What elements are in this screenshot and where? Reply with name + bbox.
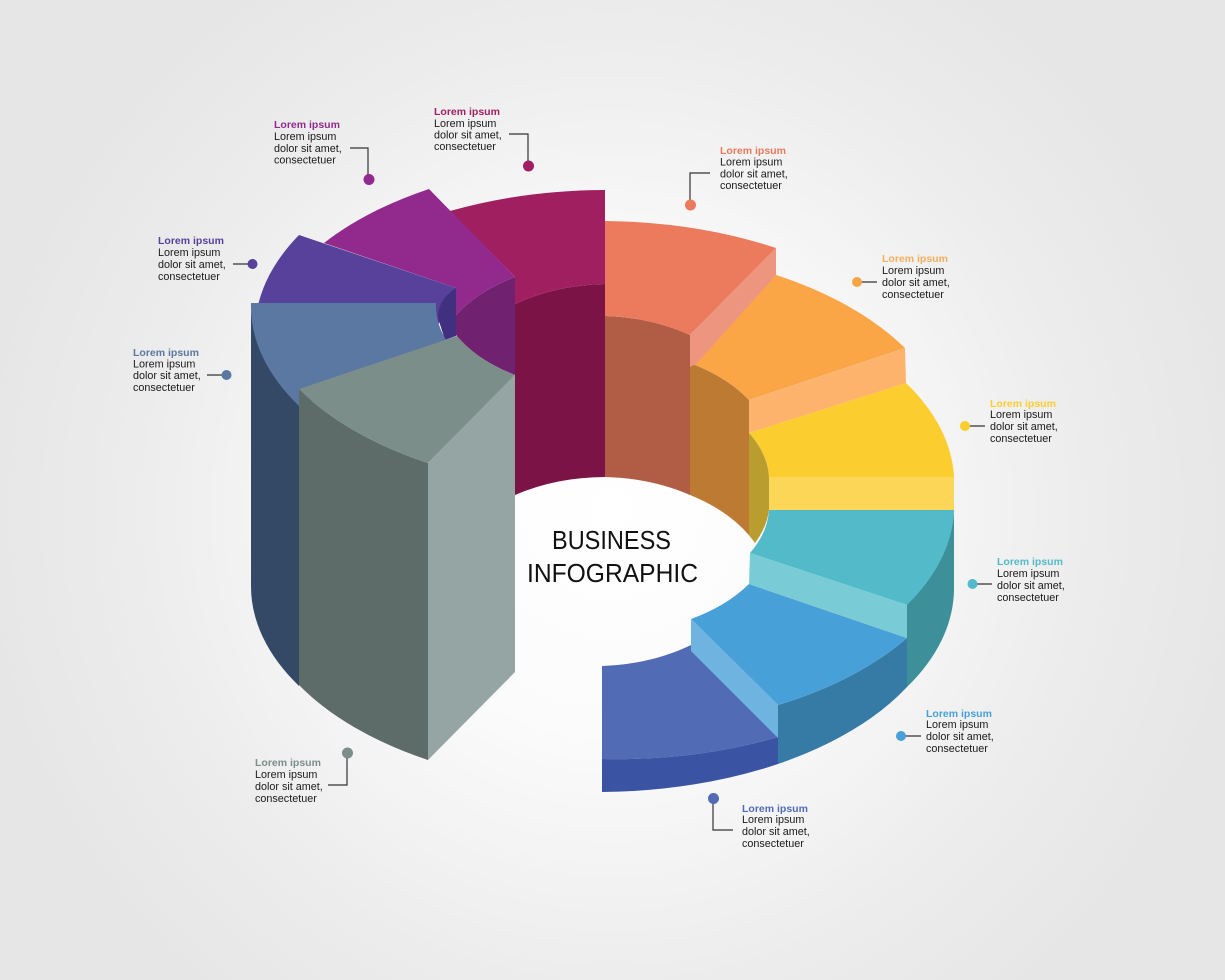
callout: salmon bbox=[685, 145, 788, 210]
callout: yellow: dolor sit amet, bbox=[990, 421, 1058, 433]
callout: yellow bbox=[960, 398, 1058, 445]
callout: blue: Lorem ipsum bbox=[926, 708, 992, 720]
callout: salmon: consectetuer bbox=[720, 180, 782, 192]
callout: crimson: consectetuer bbox=[434, 141, 496, 153]
callout: crimson: Lorem ipsum bbox=[434, 118, 496, 130]
callout: indigo: dolor sit amet, bbox=[158, 259, 226, 271]
segment: orange bbox=[690, 275, 906, 543]
callout: violet: consectetuer bbox=[274, 154, 336, 166]
segment: blue bbox=[691, 584, 907, 764]
title: BUSINESS bbox=[552, 525, 671, 555]
callout: indigo bbox=[158, 235, 258, 283]
callout: slate blue: dolor sit amet, bbox=[133, 370, 201, 382]
segment: crimson bbox=[450, 190, 605, 495]
title bbox=[527, 525, 698, 588]
callout: crimson: Lorem ipsum bbox=[434, 106, 500, 118]
callout: indigo blue bbox=[708, 793, 810, 850]
segment: indigo blue bbox=[602, 645, 778, 792]
callout: orange: dolor sit amet, bbox=[882, 277, 950, 289]
segment: salmon bbox=[605, 221, 776, 495]
callout: indigo blue: consectetuer bbox=[742, 838, 804, 850]
callout: violet: dolor sit amet, bbox=[274, 143, 342, 155]
callout: orange: Lorem ipsum bbox=[882, 265, 944, 277]
segment: grey green bbox=[299, 336, 515, 760]
callout: blue: consectetuer bbox=[926, 743, 988, 755]
segment: violet bbox=[324, 189, 515, 375]
callout: orange: consectetuer bbox=[882, 289, 944, 301]
callout: slate blue bbox=[133, 347, 232, 394]
callout: orange bbox=[852, 253, 950, 301]
callout: indigo blue: Lorem ipsum bbox=[742, 814, 804, 826]
callout: indigo blue: dolor sit amet, bbox=[742, 826, 810, 838]
callout: yellow: Lorem ipsum bbox=[990, 409, 1052, 421]
callout: violet: Lorem ipsum bbox=[274, 119, 340, 131]
callout: grey green: dolor sit amet, bbox=[255, 781, 323, 793]
callout: salmon: Lorem ipsum bbox=[720, 145, 786, 157]
callout: blue bbox=[896, 708, 994, 755]
callout: indigo: Lorem ipsum bbox=[158, 247, 220, 259]
callout: slate blue: Lorem ipsum bbox=[133, 347, 199, 359]
callout: blue: dolor sit amet, bbox=[926, 731, 994, 743]
callout: teal bbox=[968, 556, 1065, 604]
callout: grey green bbox=[255, 748, 353, 805]
segment: teal bbox=[749, 510, 954, 687]
callout: teal: consectetuer bbox=[997, 592, 1059, 604]
callout: teal: dolor sit amet, bbox=[997, 580, 1065, 592]
callout: yellow: consectetuer bbox=[990, 433, 1052, 445]
callout: yellow: Lorem ipsum bbox=[990, 398, 1056, 410]
callout: slate blue: Lorem ipsum bbox=[133, 358, 195, 370]
segment: yellow bbox=[749, 383, 954, 543]
title: INFOGRAPHIC bbox=[527, 558, 698, 588]
segment: slate blue bbox=[251, 303, 446, 686]
callout: teal: Lorem ipsum bbox=[997, 556, 1063, 568]
callout: slate blue: consectetuer bbox=[133, 382, 195, 394]
callout: crimson: dolor sit amet, bbox=[434, 130, 502, 142]
callout: indigo blue: Lorem ipsum bbox=[742, 803, 808, 815]
callout: violet bbox=[274, 119, 374, 185]
callout: grey green: consectetuer bbox=[255, 793, 317, 805]
segment: indigo bbox=[257, 235, 456, 340]
callout: grey green: Lorem ipsum bbox=[255, 757, 321, 769]
callout: salmon: Lorem ipsum bbox=[720, 156, 782, 168]
callout: violet: Lorem ipsum bbox=[274, 131, 336, 143]
callout: indigo: Lorem ipsum bbox=[158, 235, 224, 247]
callout: grey green: Lorem ipsum bbox=[255, 769, 317, 781]
callout: teal: Lorem ipsum bbox=[997, 568, 1059, 580]
callout: crimson bbox=[434, 106, 534, 172]
callout: indigo: consectetuer bbox=[158, 271, 220, 283]
callout: salmon: dolor sit amet, bbox=[720, 168, 788, 180]
callout: blue: Lorem ipsum bbox=[926, 719, 988, 731]
callout: orange: Lorem ipsum bbox=[882, 253, 948, 265]
